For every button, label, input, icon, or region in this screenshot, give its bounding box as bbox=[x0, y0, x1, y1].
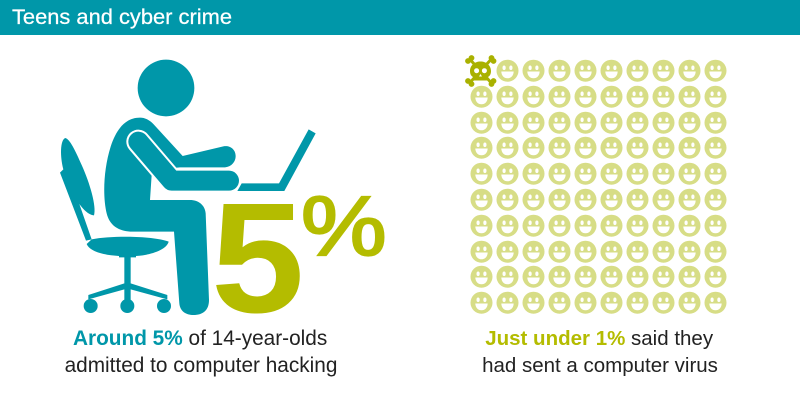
near arm bbox=[138, 142, 229, 181]
head bbox=[138, 60, 194, 116]
smiley face grid bbox=[470, 60, 726, 314]
chair base bbox=[88, 257, 167, 300]
big 5 percent figure: % bbox=[301, 180, 387, 274]
laptop bbox=[237, 129, 316, 191]
icon: person at laptop on chair bbox=[60, 60, 316, 315]
big 5 percent figure: 5 bbox=[211, 171, 304, 346]
icon: skull and crossbones bbox=[465, 55, 496, 87]
caption: hacking: Around 5% of 14-year-olds bbox=[73, 327, 327, 350]
header bar bbox=[0, 0, 800, 35]
big 5 percent figure bbox=[211, 171, 387, 346]
caption: virus: had sent a computer virus bbox=[482, 354, 718, 377]
chair back bbox=[60, 138, 95, 241]
title: Teens and cyber crime bbox=[12, 5, 232, 29]
chair seat bbox=[87, 237, 169, 257]
torso, leg and far arm bbox=[104, 118, 236, 315]
caption: virus: Just under 1% said they bbox=[485, 327, 713, 350]
caption: hacking: admitted to computer hacking bbox=[65, 354, 337, 377]
